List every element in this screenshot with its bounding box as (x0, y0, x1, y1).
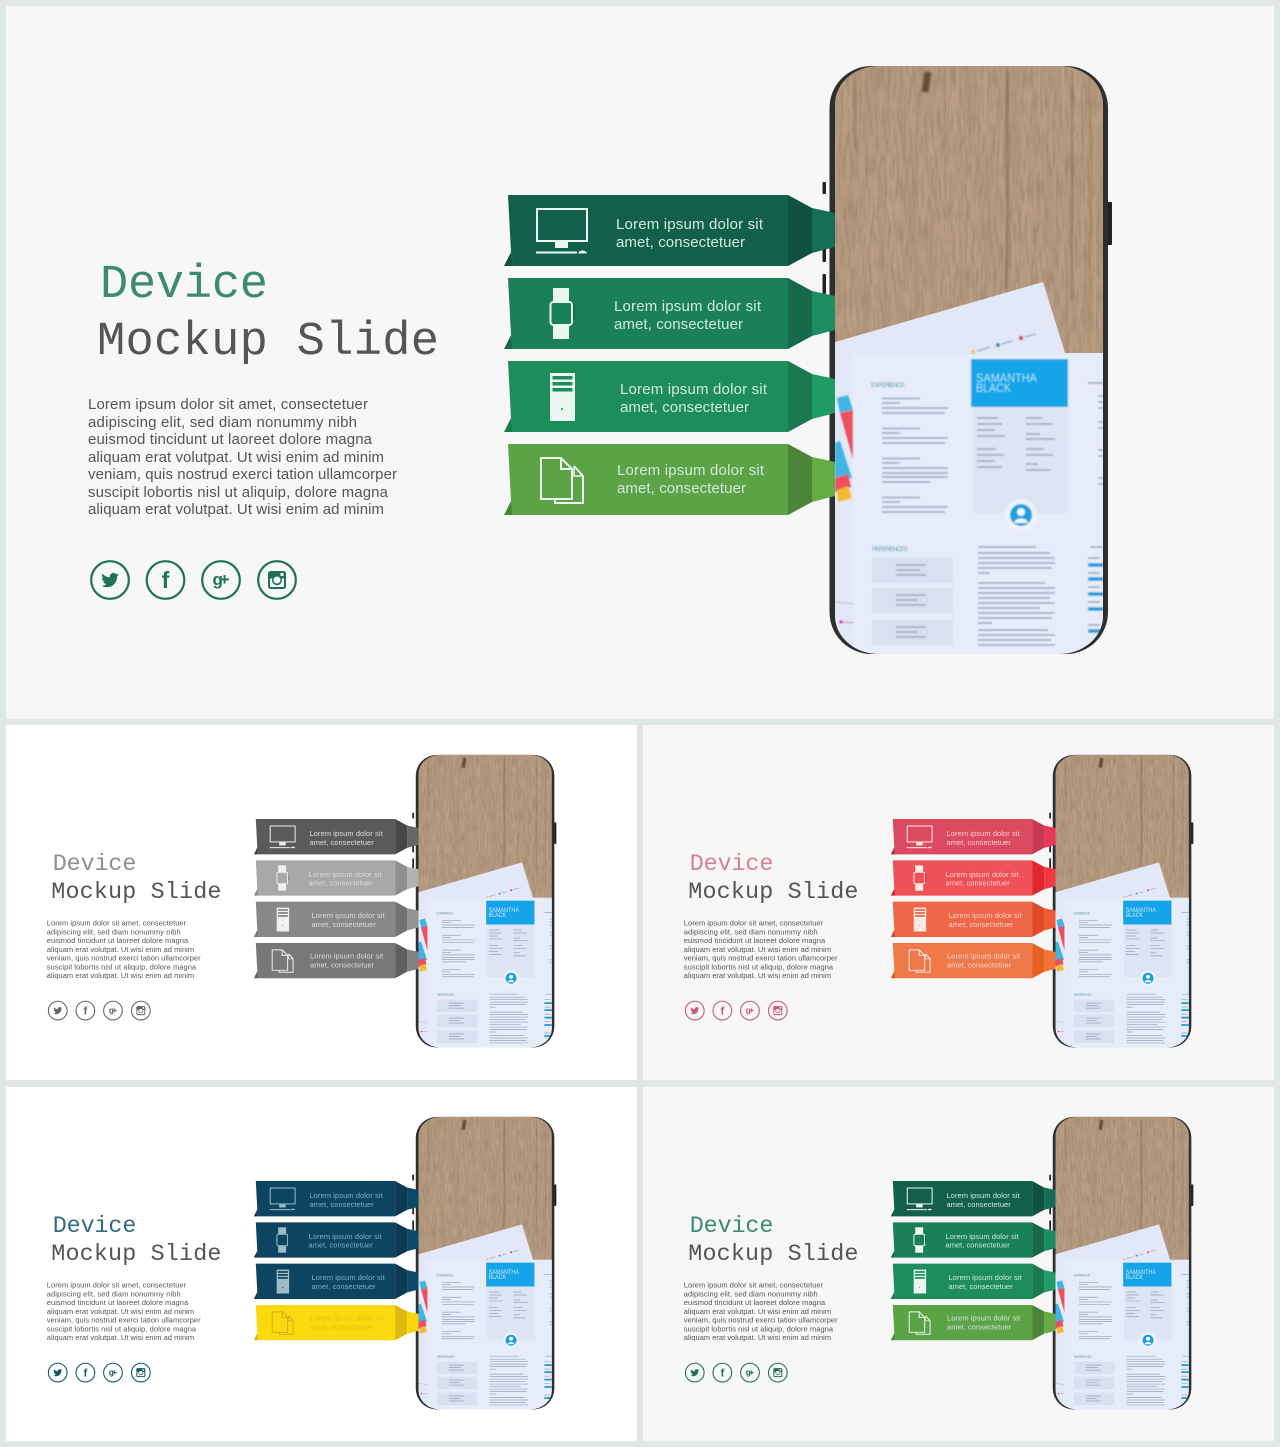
ribbon: desktop tower: Lorem ipsum dolor sit (620, 381, 768, 398)
social icons: f (83, 1368, 87, 1380)
slide content (684, 1117, 1193, 1409)
social icons: g+ (746, 1367, 754, 1377)
body text: aliquam erat volutpat. Ut wisi enim ad minim (88, 449, 384, 466)
social icons (685, 1001, 787, 1020)
ribbon: documents (891, 943, 1056, 978)
body text: aliquam erat volutpat. Ut wisi enim ad minim (684, 1333, 831, 1342)
body text: euismod tincidunt ut laoreet dolore magna (47, 1298, 189, 1307)
title (97, 259, 439, 369)
ribbon: documents: amet, consectetuer (947, 960, 1012, 969)
phone mockup: SAMANTHA (976, 371, 1037, 385)
social icons: f (83, 1006, 87, 1018)
ribbon: monitor (254, 819, 419, 854)
ribbon: watch: amet, consectetuer (309, 879, 373, 888)
ribbon: monitor: Lorem ipsum dolor sit (947, 829, 1021, 838)
body text: aliquam erat volutpat. Ut wisi enim ad minim (684, 945, 831, 954)
body text (684, 1281, 838, 1342)
social icons (91, 561, 296, 599)
social icons (48, 1001, 150, 1020)
body text: Lorem ipsum dolor sit amet, consectetuer (684, 1281, 824, 1290)
ribbon: desktop tower: amet, consectetuer (949, 1282, 1013, 1291)
phone mockup: SAMANTHA (489, 908, 519, 914)
title: Device (100, 259, 268, 312)
ribbon: documents: Lorem ipsum dolor sit (617, 462, 765, 479)
ribbon: documents (891, 1305, 1056, 1340)
phone mockup: REFERENCES (1074, 1355, 1092, 1359)
social icons (685, 1363, 787, 1382)
body text: euismod tincidunt ut laoreet dolore magna (47, 936, 189, 945)
ribbon: desktop tower: amet, consectetuer (312, 920, 376, 929)
ribbon: watch: amet, consectetuer (614, 316, 743, 333)
ribbon: desktop tower: amet, consectetuer (949, 920, 1013, 929)
phone mockup: EXPERIENCE (436, 912, 454, 916)
title: Mockup Slide (97, 316, 439, 369)
phone mockup (1049, 755, 1193, 1047)
body text: Lorem ipsum dolor sit amet, consectetuer (47, 1281, 187, 1290)
ribbon: monitor: Lorem ipsum dolor sit (310, 1191, 384, 1200)
phone mockup: EXPERIENCE (1073, 912, 1091, 916)
ribbon: watch (504, 278, 835, 349)
ribbon: monitor: amet, consectetuer (947, 1200, 1011, 1209)
ribbon: monitor: Lorem ipsum dolor sit (947, 1191, 1021, 1200)
phone mockup: REFERENCES (1074, 993, 1092, 997)
ribbon: documents: amet, consectetuer (310, 1322, 375, 1331)
ribbon: desktop tower (891, 1264, 1056, 1299)
ribbon: watch (891, 1222, 1056, 1258)
slide background (6, 1087, 637, 1441)
title: Mockup Slide (688, 1242, 858, 1268)
ribbon: documents: amet, consectetuer (310, 960, 375, 969)
title: Device (690, 1214, 773, 1240)
slide content (684, 755, 1193, 1047)
body text: veniam, quis nostrud exerci tation ullamcorper (47, 953, 201, 962)
body text: veniam, quis nostrud exerci tation ullamcorper (47, 1315, 201, 1324)
title: Device (53, 852, 136, 878)
social icons: f (720, 1006, 724, 1018)
ribbon: monitor: amet, consectetuer (310, 838, 374, 847)
ribbon: monitor (504, 195, 835, 266)
social icons: g+ (109, 1005, 117, 1015)
panel: small green variant (643, 1087, 1274, 1441)
body text: suscipit lobortis nisl ut aliquip, dolore magna (684, 962, 834, 971)
ribbon: watch (254, 860, 419, 896)
social icons (48, 1363, 150, 1382)
ribbon: watch: Lorem ipsum dolor sit (946, 1232, 1020, 1241)
ribbon: monitor: amet, consectetuer (616, 234, 745, 251)
social icons: f (720, 1368, 724, 1380)
panel: large green slide (6, 6, 1274, 719)
title: Mockup Slide (688, 880, 858, 906)
phone mockup: BLACK (489, 913, 506, 919)
phone mockup: BLACK (489, 1275, 506, 1281)
ribbon: documents: Lorem ipsum dolor sit (947, 951, 1021, 960)
body text: veniam, quis nostrud exerci tation ullamcorper (684, 953, 838, 962)
ribbon: watch: amet, consectetuer (946, 1241, 1010, 1250)
panel: red variant (643, 725, 1274, 1080)
phone mockup: SAMANTHA (1126, 1270, 1156, 1276)
body text (47, 1281, 201, 1342)
phone mockup (412, 1117, 556, 1409)
ribbon: documents (504, 444, 835, 515)
body text: adipiscing elit, sed diam nonummy nibh (88, 414, 357, 431)
phone mockup: SAMANTHA (1126, 908, 1156, 914)
phone mockup: REFERENCES (872, 546, 909, 553)
body text: aliquam erat volutpat. Ut wisi enim ad minim (47, 971, 194, 980)
phone mockup: REFERENCES (437, 1355, 455, 1359)
body text: Lorem ipsum dolor sit amet, consectetuer (88, 396, 368, 413)
ribbon: desktop tower (504, 361, 835, 432)
ribbon: watch: Lorem ipsum dolor sit (309, 1232, 383, 1241)
slide background (6, 6, 1274, 719)
slide content (47, 755, 556, 1047)
ribbon: documents: amet, consectetuer (947, 1322, 1012, 1331)
title: Device (690, 852, 773, 878)
phone mockup: REFERENCES (437, 993, 455, 997)
title (51, 1214, 221, 1268)
ribbon: documents: Lorem ipsum dolor sit (310, 1313, 384, 1322)
phone mockup: EXPERIENCE (1073, 1274, 1091, 1278)
ribbon: monitor: Lorem ipsum dolor sit (616, 216, 764, 233)
slide background (643, 1087, 1274, 1441)
body text: veniam, quis nostrud exerci tation ullamcorper (684, 1315, 838, 1324)
social icons: g+ (109, 1367, 117, 1377)
body text: adipiscing elit, sed diam nonummy nibh (47, 927, 181, 936)
ribbon: watch: Lorem ipsum dolor sit (946, 870, 1020, 879)
body text: suscipit lobortis nisl ut aliquip, dolore magna (47, 1324, 197, 1333)
phone mockup: BLACK (1126, 913, 1143, 919)
ribbon: desktop tower (254, 902, 419, 937)
ribbon: documents (254, 1305, 419, 1340)
body text: adipiscing elit, sed diam nonummy nibh (684, 927, 818, 936)
panel: gray variant (6, 725, 637, 1080)
phone mockup: EXPERIENCE (871, 382, 906, 389)
ribbon: monitor (254, 1181, 419, 1216)
slide background (6, 725, 637, 1080)
body text: aliquam erat volutpat. Ut wisi enim ad minim (88, 501, 384, 518)
body text: euismod tincidunt ut laoreet dolore magna (88, 431, 373, 448)
slide content (47, 1117, 556, 1409)
body text: aliquam erat volutpat. Ut wisi enim ad minim (684, 1307, 831, 1316)
body text: aliquam erat volutpat. Ut wisi enim ad minim (47, 1333, 194, 1342)
title (688, 1214, 858, 1268)
body text: euismod tincidunt ut laoreet dolore magna (684, 1298, 826, 1307)
slide background (643, 725, 1274, 1080)
phone mockup (1049, 1117, 1193, 1409)
social icons: g+ (746, 1005, 754, 1015)
ribbon: documents: amet, consectetuer (617, 480, 746, 497)
title (51, 852, 221, 906)
body text: Lorem ipsum dolor sit amet, consectetuer (47, 919, 187, 928)
ribbon: watch (254, 1222, 419, 1258)
ribbon: desktop tower: amet, consectetuer (312, 1282, 376, 1291)
ribbon: watch: amet, consectetuer (309, 1241, 373, 1250)
ribbon: desktop tower: Lorem ipsum dolor sit (949, 1273, 1023, 1282)
body text: veniam, quis nostrud exerci tation ullamcorper (88, 466, 397, 483)
ribbon: monitor (891, 819, 1056, 854)
ribbon: watch: Lorem ipsum dolor sit (309, 870, 383, 879)
title: Mockup Slide (51, 880, 221, 906)
ribbon: monitor (891, 1181, 1056, 1216)
ribbon: watch: amet, consectetuer (946, 879, 1010, 888)
ribbon: desktop tower: amet, consectetuer (620, 399, 749, 416)
ribbon: monitor: amet, consectetuer (310, 1200, 374, 1209)
ribbon: desktop tower: Lorem ipsum dolor sit (312, 1273, 386, 1282)
ribbon: desktop tower: Lorem ipsum dolor sit (312, 911, 386, 920)
social icons: g+ (212, 570, 230, 589)
ribbon: documents: Lorem ipsum dolor sit (310, 951, 384, 960)
body text (684, 919, 838, 980)
phone mockup: BLACK (1126, 1275, 1143, 1281)
ribbon: documents: Lorem ipsum dolor sit (947, 1313, 1021, 1322)
title (688, 852, 858, 906)
phone mockup (412, 755, 556, 1047)
body text: suscipit lobortis nisl ut aliquip, dolore magna (47, 962, 197, 971)
phone mockup: EXPERIENCE (436, 1274, 454, 1278)
body text: suscipit lobortis nisl ut aliquip, dolore magna (684, 1324, 834, 1333)
title: Mockup Slide (51, 1242, 221, 1268)
ribbon: monitor: Lorem ipsum dolor sit (310, 829, 384, 838)
body text (47, 919, 201, 980)
body text: Lorem ipsum dolor sit amet, consectetuer (684, 919, 824, 928)
phone mockup: BLACK (976, 381, 1011, 395)
social icons: f (162, 567, 170, 593)
ribbon: watch: Lorem ipsum dolor sit (614, 298, 762, 315)
body text: adipiscing elit, sed diam nonummy nibh (684, 1289, 818, 1298)
body text: suscipit lobortis nisl ut aliquip, dolore magna (88, 484, 389, 501)
ribbon: desktop tower (891, 902, 1056, 937)
panel: navy and yellow variant (6, 1087, 637, 1441)
ribbon: desktop tower (254, 1264, 419, 1299)
title: Device (53, 1214, 136, 1240)
phone mockup (822, 66, 1112, 654)
body text: aliquam erat volutpat. Ut wisi enim ad minim (47, 945, 194, 954)
body text: adipiscing elit, sed diam nonummy nibh (47, 1289, 181, 1298)
phone mockup: SAMANTHA (489, 1270, 519, 1276)
ribbon: watch (891, 860, 1056, 896)
body text: aliquam erat volutpat. Ut wisi enim ad minim (684, 971, 831, 980)
body text (88, 396, 397, 518)
ribbon: documents (254, 943, 419, 978)
body text: euismod tincidunt ut laoreet dolore magna (684, 936, 826, 945)
ribbon: monitor: amet, consectetuer (947, 838, 1011, 847)
ribbon: desktop tower: Lorem ipsum dolor sit (949, 911, 1023, 920)
body text: aliquam erat volutpat. Ut wisi enim ad minim (47, 1307, 194, 1316)
